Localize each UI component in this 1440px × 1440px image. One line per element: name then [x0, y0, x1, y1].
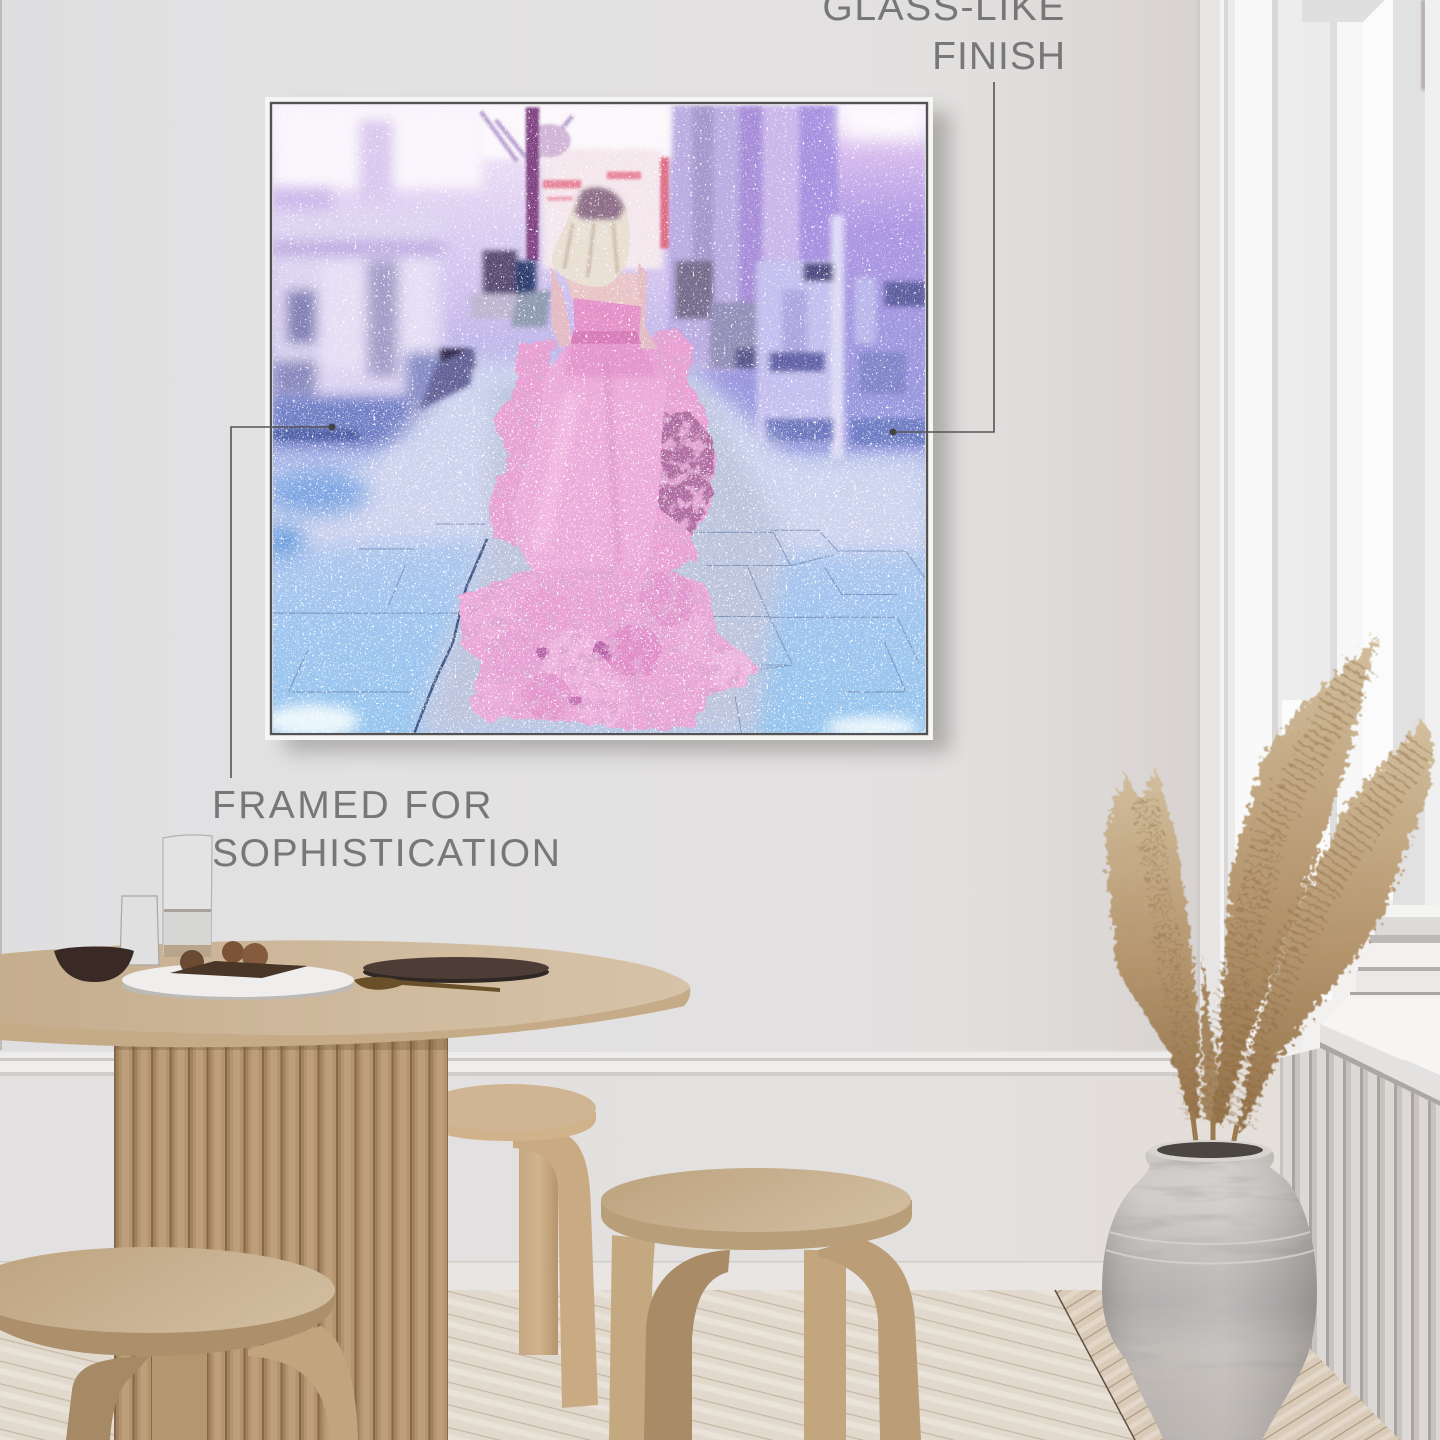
callout line: framed	[231, 424, 336, 778]
callout text: framed for sophistication	[212, 784, 562, 875]
window sill	[1322, 997, 1440, 1075]
plume: left	[1105, 766, 1200, 1122]
glass carafe	[163, 835, 212, 957]
bodice	[574, 298, 641, 340]
back	[564, 273, 641, 306]
plume: middle	[1213, 636, 1377, 1122]
building base lines	[274, 429, 359, 440]
callout text: glass-like finish	[822, 0, 1066, 78]
sparkles	[273, 105, 925, 733]
white frame	[265, 97, 933, 740]
callout text: framed for sophistication: FRAMED FOR	[212, 784, 494, 827]
pale corners	[265, 704, 359, 738]
walkway	[419, 385, 784, 733]
marble plate with nuts	[122, 941, 354, 1000]
frame shadow	[285, 112, 950, 752]
vase bands	[1106, 1232, 1315, 1264]
vase	[1102, 1140, 1317, 1440]
wall	[0, 0, 1200, 1060]
hair	[552, 187, 630, 287]
street sky glow	[479, 105, 671, 159]
plume: right	[1237, 720, 1433, 1132]
pavement joints	[274, 524, 926, 733]
pale top right corner	[842, 105, 927, 139]
blue patch left	[265, 470, 368, 516]
window ledge and books	[1350, 905, 1440, 995]
floor	[0, 1290, 1440, 1440]
dark street objects	[419, 250, 551, 410]
tree	[481, 107, 573, 261]
dining table top	[0, 940, 690, 1047]
back stool	[424, 1084, 598, 1408]
vase mouth	[1148, 1140, 1272, 1162]
pampas grass	[1105, 636, 1433, 1150]
dark bowl	[54, 946, 134, 982]
ruffles along the skirt sides	[489, 327, 716, 580]
callout text: glass-like finish: FINISH	[932, 35, 1066, 78]
stems	[1192, 1110, 1237, 1150]
radiator	[1280, 1048, 1440, 1440]
art image	[265, 105, 927, 738]
skirt	[512, 344, 666, 572]
drinking glass	[120, 896, 159, 965]
front stool	[601, 1168, 921, 1440]
framed artwork	[265, 97, 950, 752]
fine haze	[273, 105, 925, 733]
table pedestal	[114, 1030, 448, 1440]
window and mouldings	[1197, 0, 1440, 1290]
arms	[550, 263, 658, 349]
right building mass	[671, 105, 927, 454]
train of ruffles	[459, 563, 761, 731]
near stool	[0, 1247, 358, 1440]
pavement kerb line	[415, 539, 487, 733]
callout text: framed for sophistication: SOPHISTICATION	[212, 832, 562, 875]
wainscot and chair rail	[0, 1050, 1290, 1290]
paving	[273, 360, 926, 733]
plume: centre	[1202, 955, 1222, 1122]
wooden plate	[363, 957, 549, 983]
spoon	[354, 977, 500, 992]
red arch	[543, 157, 669, 248]
right building columns	[671, 105, 926, 460]
left building haze	[273, 105, 482, 447]
callout line: glass-like finish	[890, 82, 994, 436]
